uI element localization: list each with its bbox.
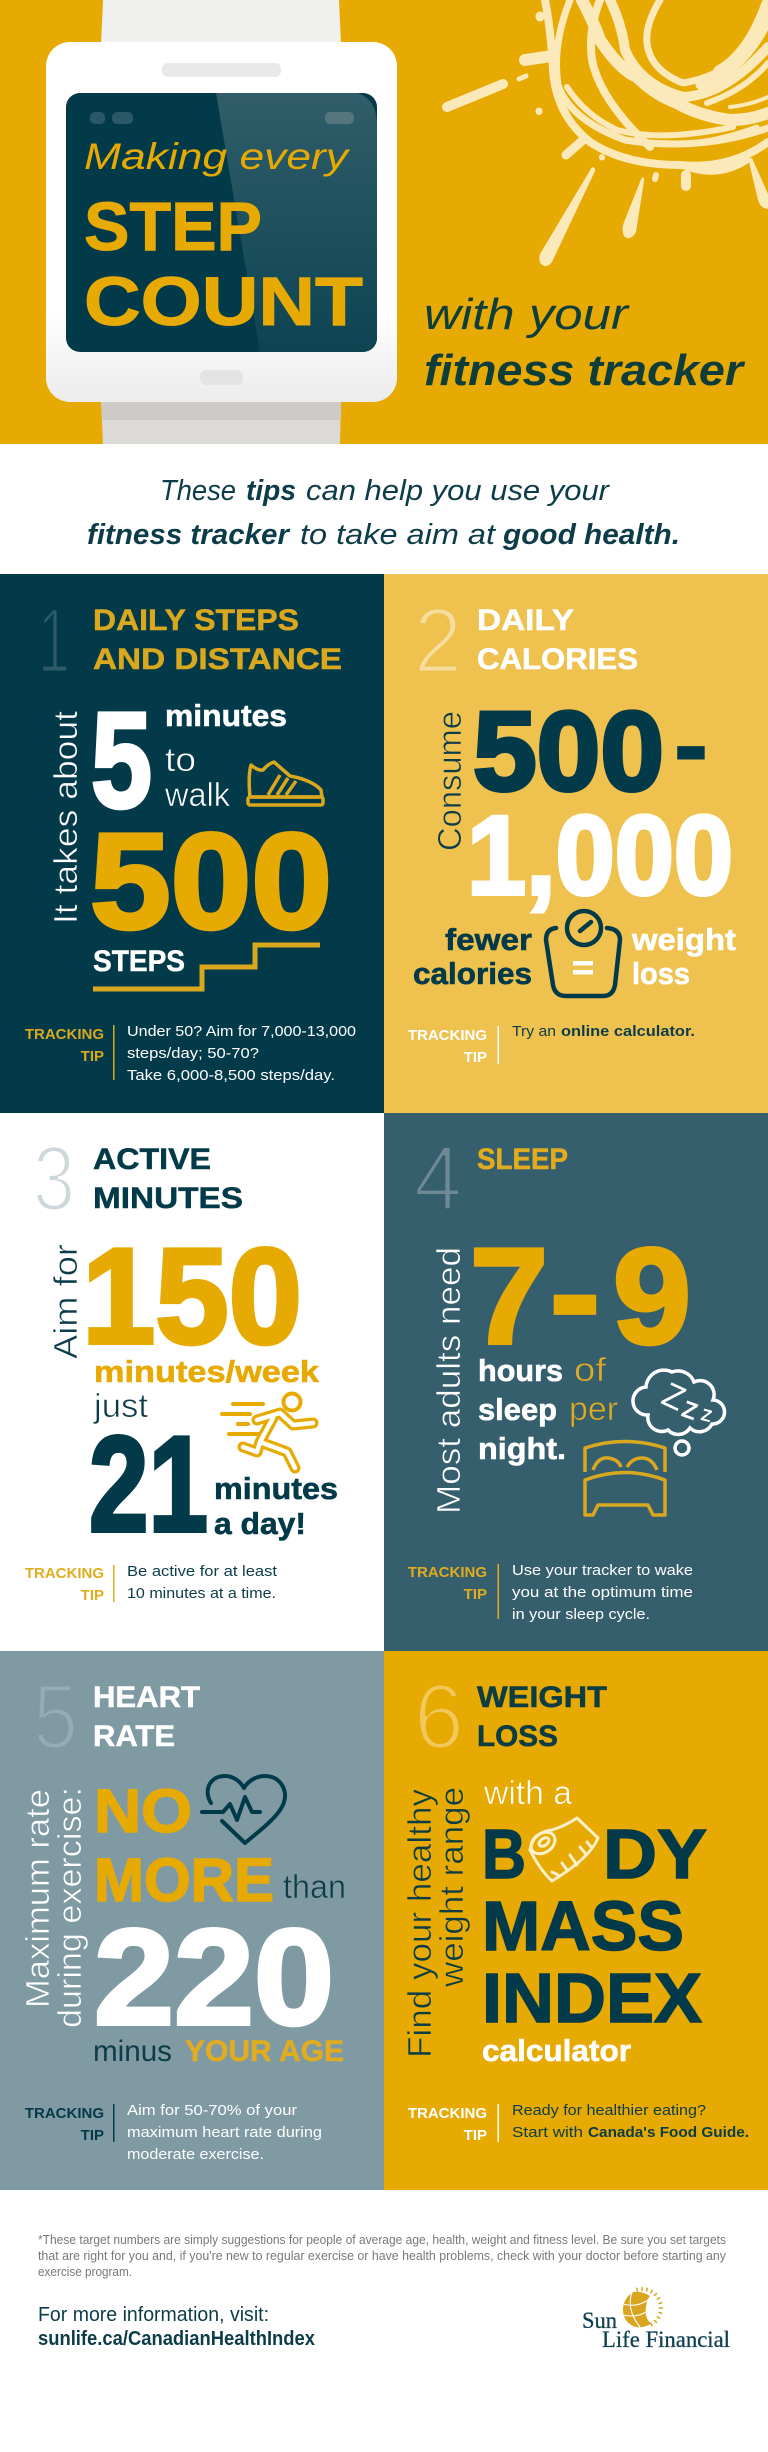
tracking tip: Be active for at least <box>127 1563 278 1580</box>
body mass index: B <box>482 1815 526 1893</box>
heading <box>477 604 638 676</box>
tracking tip: TIP <box>464 1586 487 1603</box>
big 500: 500 <box>90 805 332 957</box>
panel 6: weight loss <box>384 1651 768 2190</box>
tracking tip: TIP <box>81 1587 104 1604</box>
footnote: *These target numbers are simply suggestions for people of average age, health, weight and fitness level. Be sure you set targets <box>38 2232 726 2247</box>
header tagline <box>424 290 746 395</box>
tracking tip: TRACKING <box>408 1564 487 1581</box>
number 3: 3 <box>33 1128 75 1230</box>
footnote: exercise program. <box>38 2264 132 2279</box>
hours of sleep per night <box>478 1351 618 1466</box>
fewer calories: calories <box>413 956 532 991</box>
intro text: tips <box>246 475 296 507</box>
hours of sleep per night: night. <box>478 1431 566 1466</box>
body mass index: INDEX <box>482 1959 702 2037</box>
watch strap bottom <box>101 400 341 444</box>
icon: scale <box>546 911 620 996</box>
intro text: to take aim at <box>300 519 497 551</box>
heading: AND DISTANCE <box>93 643 342 676</box>
tracking tip: Try an <box>512 1023 556 1040</box>
icon: measuring tape <box>527 1818 598 1881</box>
tracking tip <box>408 2102 749 2144</box>
heading <box>93 604 342 676</box>
panel 5: heart rate <box>0 1651 384 2190</box>
minutes to walk: to <box>165 741 196 778</box>
tracking tip <box>25 1563 278 1604</box>
minus your age: minus <box>93 2035 172 2068</box>
icon: cloud zzz: Z <box>699 1405 714 1426</box>
icon: heart with pulse <box>202 1776 285 1843</box>
icon: cloud zzz: Z <box>656 1375 691 1419</box>
body mass index: DY <box>603 1815 707 1893</box>
tracking tip: Aim for 50-70% of your <box>127 2102 297 2119</box>
minutes a day: minutes <box>214 1471 338 1506</box>
vertical text: weight range <box>433 1787 470 1988</box>
heading <box>93 1143 243 1215</box>
panel 3: active minutes <box>0 1113 384 1651</box>
heading: ACTIVE <box>93 1143 211 1176</box>
tracking tip: 10 minutes at a time. <box>127 1585 276 1602</box>
logo: Sun Life Financial: Life Financial <box>602 2327 730 2352</box>
tracking tip: Use your tracker to wake <box>512 1562 693 1579</box>
heading: WEIGHT <box>477 1681 607 1714</box>
vertical text: Most adults need <box>430 1247 467 1514</box>
heading: DAILY STEPS <box>93 604 299 637</box>
big 500-: 500 <box>473 689 664 814</box>
no more <box>94 1777 274 1914</box>
heading: RATE <box>93 1720 175 1753</box>
more information <box>38 2304 315 2350</box>
heading: MINUTES <box>93 1182 243 1215</box>
weight loss: weight <box>631 922 736 957</box>
heading <box>93 1681 200 1753</box>
more information: sunlife.ca/CanadianHealthIndex <box>38 2328 315 2350</box>
header banner <box>0 0 768 444</box>
big 7-9 <box>470 1217 691 1372</box>
tracking tip: maximum heart rate during <box>127 2124 322 2141</box>
tracking tip: TIP <box>81 2127 104 2144</box>
big 500-: - <box>673 681 709 806</box>
minutes/week: minutes/week <box>94 1354 320 1389</box>
tracking tip: you at the optimum time <box>512 1584 693 1601</box>
icon: stairs <box>93 945 320 989</box>
steps label: STEPS <box>93 945 185 978</box>
with a: with a <box>483 1774 573 1811</box>
tracking tip: moderate exercise. <box>127 2146 264 2163</box>
hours of sleep per night: of <box>574 1351 607 1388</box>
tracking tip <box>408 1562 693 1623</box>
heading: SLEEP <box>477 1143 568 1176</box>
icon: cloud zzz <box>633 1370 725 1455</box>
header tagline: fitness tracker <box>424 346 746 395</box>
tracking tip: Take 6,000-8,500 steps/day. <box>127 1067 335 1084</box>
vertical text: during exercise: <box>51 1787 88 2028</box>
screen title: STEP <box>84 188 262 265</box>
watch body <box>46 42 397 402</box>
tracking tip: TIP <box>81 1048 104 1065</box>
intro text: good health. <box>502 519 680 551</box>
calculator: calculator <box>482 2033 631 2068</box>
big 7-9: 7 <box>470 1220 548 1372</box>
tracking tip: online calculator. <box>561 1023 695 1040</box>
tracking tip: TRACKING <box>25 1565 104 1582</box>
minutes to walk: minutes <box>165 698 287 733</box>
footnote: that are right for you and, if you're new to regular exercise or have health problems, check with your doctor before starting any <box>38 2248 726 2263</box>
intro text: fitness tracker <box>87 519 291 551</box>
icon: bed <box>585 1442 665 1515</box>
minus your age: YOUR AGE <box>185 2035 344 2068</box>
heading: HEART <box>93 1681 200 1714</box>
minutes to walk <box>164 698 287 813</box>
big 220: 220 <box>94 1901 334 2053</box>
hours of sleep per night: sleep <box>478 1392 557 1427</box>
than: than <box>283 1868 346 1905</box>
no more: NO <box>94 1777 192 1845</box>
panel 2: daily calories <box>384 574 768 1113</box>
weight loss: loss <box>632 956 690 991</box>
number 5: 5 <box>33 1666 78 1768</box>
watch screen <box>66 93 377 352</box>
logo: Sun Life Financial: Sun <box>582 2308 617 2333</box>
icon: sun globe <box>623 2287 663 2327</box>
fewer calories: fewer <box>445 922 532 957</box>
panel 4: sleep <box>384 1113 768 1651</box>
number 1: 1 <box>38 590 70 692</box>
hours of sleep per night: per <box>569 1390 618 1427</box>
icon: shoe <box>248 762 323 805</box>
screen title: COUNT <box>84 263 363 340</box>
heading: LOSS <box>477 1720 558 1753</box>
minutes to walk: walk <box>164 776 230 813</box>
big 21: 21 <box>89 1408 208 1560</box>
vertical text <box>19 1787 88 2028</box>
vertical text: Find your healthy <box>401 1788 438 2058</box>
minutes a day: a day! <box>214 1506 306 1541</box>
tracking tip: in your sleep cycle. <box>512 1606 650 1623</box>
logo: Sun Life Financial <box>582 2287 730 2352</box>
screen title <box>84 136 363 340</box>
intro text: can help you use your <box>306 475 610 507</box>
heading: CALORIES <box>477 643 638 676</box>
minus your age <box>93 2035 344 2068</box>
big 7-9: - <box>550 1217 600 1369</box>
number 6: 6 <box>414 1666 464 1768</box>
vertical text <box>401 1787 470 2058</box>
weight loss <box>631 922 736 991</box>
big 1,000: 1,000 <box>467 793 733 918</box>
tracking tip <box>25 2102 322 2163</box>
tracking tip: TRACKING <box>408 2105 487 2122</box>
header tagline: with your <box>424 290 631 339</box>
hours of sleep per night: hours <box>478 1353 563 1388</box>
heading: DAILY <box>477 604 574 637</box>
vertical text: Maximum rate <box>19 1789 56 2008</box>
fewer calories <box>413 922 532 991</box>
big 5: 5 <box>91 684 152 836</box>
tracking tip <box>408 1023 695 1066</box>
intro text <box>87 475 680 551</box>
icon: cloud zzz: Z <box>678 1396 701 1426</box>
minutes a day <box>214 1471 338 1541</box>
heading <box>477 1681 607 1753</box>
tracking tip: TRACKING <box>408 1027 487 1044</box>
number 2: 2 <box>414 590 462 692</box>
footnote <box>38 2232 726 2279</box>
icon: runner <box>222 1394 313 1468</box>
watch strap top <box>101 0 341 44</box>
big 7-9: 9 <box>613 1220 691 1372</box>
tracking tip: TIP <box>464 1049 487 1066</box>
vertical text: Consume <box>431 711 468 851</box>
screen title: Making every <box>84 136 351 177</box>
tracking tip: TIP <box>464 2127 487 2144</box>
no more: MORE <box>94 1846 274 1914</box>
body mass index <box>482 1815 707 2037</box>
tracking tip: TRACKING <box>25 2105 104 2122</box>
tracking tip <box>25 1023 356 1084</box>
tracking tip: Under 50? Aim for 7,000-13,000 <box>127 1023 356 1040</box>
body mass index: MASS <box>482 1887 684 1965</box>
intro text: These <box>160 475 236 507</box>
tracking tip: Ready for healthier eating? <box>512 2102 706 2119</box>
panel 1: daily steps and distance <box>0 574 384 1113</box>
icon: sun scribble <box>447 0 768 266</box>
vertical text: It takes about <box>47 711 84 924</box>
tracking tip: Canada's Food Guide. <box>588 2124 749 2141</box>
just: just <box>93 1387 148 1424</box>
tracking tip: Start with <box>512 2124 583 2141</box>
number 4: 4 <box>414 1128 462 1230</box>
big 150: 150 <box>82 1220 302 1372</box>
vertical text: Aim for <box>47 1244 84 1359</box>
tracking tip: TRACKING <box>25 1026 104 1043</box>
more information: For more information, visit: <box>38 2304 269 2326</box>
tracking tip: steps/day; 50-70? <box>127 1045 259 1062</box>
